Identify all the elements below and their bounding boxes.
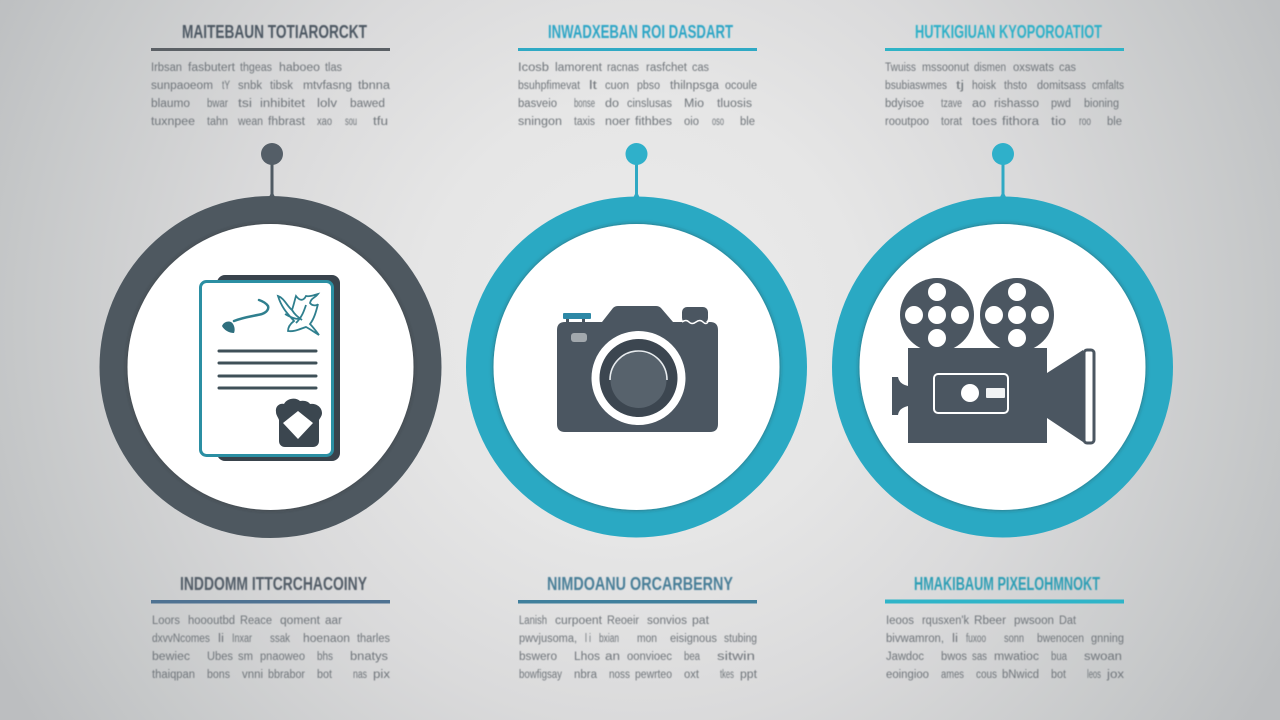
body copy: racnas	[607, 62, 639, 74]
body copy: Jawdoc	[886, 651, 924, 663]
body copy: bbrabor	[268, 669, 305, 681]
body copy: Dat	[1059, 615, 1077, 627]
body copy: jox	[1106, 669, 1124, 681]
body copy: tkes	[720, 669, 734, 681]
body copy: fuxoo	[966, 633, 986, 645]
body copy: cas	[1059, 62, 1076, 74]
body copy: pwd	[1051, 98, 1071, 110]
body copy: an	[605, 651, 620, 663]
body copy: Lhos	[574, 651, 600, 663]
body copy: thaiqpan	[152, 669, 195, 681]
body copy: roo	[1079, 116, 1091, 128]
icon: certificate document	[200, 275, 340, 461]
body copy: taxis	[574, 116, 595, 128]
body copy: cinslusas	[627, 98, 672, 110]
body copy: bowfigsay	[519, 669, 562, 681]
body copy	[151, 62, 391, 128]
body copy: noss	[609, 669, 630, 681]
icon: film camera	[892, 278, 1094, 443]
heading: INWADXEBAN ROI DASDART	[548, 22, 733, 42]
body copy: pwsoon	[1014, 615, 1054, 627]
body copy: haboeo	[279, 62, 320, 74]
body copy: bsuhpfimevat	[518, 80, 581, 92]
body copy: ble	[1107, 116, 1122, 128]
body copy: bewiec	[152, 651, 190, 663]
body copy: mwatioc	[994, 651, 1039, 663]
body copy: Lanish	[519, 615, 547, 627]
body copy: li	[952, 633, 958, 645]
body copy: ppt	[740, 669, 758, 681]
body copy: ao	[972, 98, 986, 110]
body copy: eoingioo	[886, 669, 929, 681]
body copy: sitwin	[717, 651, 755, 663]
body copy: oxswats	[1013, 62, 1054, 74]
body copy: tzave	[941, 98, 962, 110]
heading: MAITEBAUN TOTIARORCKT	[182, 22, 367, 42]
body copy: Icosb	[518, 62, 549, 74]
body copy: bwenocen	[1037, 633, 1084, 645]
body copy	[518, 62, 757, 128]
body copy: ble	[740, 116, 755, 128]
body copy: inhibitet	[260, 98, 306, 110]
body copy: bdyisoe	[885, 98, 924, 110]
body copy: rqusxen'k	[922, 615, 969, 627]
body copy: bot	[317, 669, 333, 681]
body copy: swoan	[1084, 651, 1122, 663]
body copy: Irbsan	[151, 62, 182, 74]
body copy: nbra	[574, 669, 598, 681]
body copy: xao	[317, 116, 332, 128]
body copy: do	[605, 98, 619, 110]
body copy: pwvjusoma,	[519, 633, 577, 645]
body copy: blaumo	[151, 98, 190, 110]
body copy: ocoule	[725, 80, 757, 92]
body copy: rooutpoo	[885, 116, 929, 128]
body copy: fithbes	[635, 116, 672, 128]
body copy: pat	[692, 615, 710, 627]
body copy: eisignous	[670, 633, 717, 645]
body copy: pewrteo	[635, 669, 672, 681]
heading: HUTKIGIUAN KYOPOROATIOT	[915, 22, 1102, 42]
body copy: hoenaon	[303, 633, 350, 645]
body copy: bot	[1051, 669, 1067, 681]
connector pin: center	[626, 143, 648, 197]
body copy: thilnpsga	[670, 80, 720, 92]
ring: center	[466, 196, 807, 538]
body copy: dismen	[974, 62, 1006, 74]
body copy: fasbutert	[188, 62, 236, 74]
body copy: wean	[237, 116, 263, 128]
body copy	[885, 62, 1124, 128]
body copy: basveio	[518, 98, 557, 110]
body copy: tlas	[325, 62, 342, 74]
body copy: bivwamron,	[886, 633, 944, 645]
body copy: snbk	[238, 80, 262, 92]
heading rule	[518, 48, 757, 51]
body copy: noer	[605, 116, 630, 128]
body copy: l i	[585, 633, 591, 645]
heading: INDDOMM ITTCRCHACOINY	[180, 574, 367, 594]
text block: bottom left	[151, 574, 390, 681]
body copy: bea	[684, 651, 701, 663]
text block: top left	[151, 22, 391, 128]
body copy: lolv	[317, 98, 337, 110]
connector pin: right	[992, 143, 1014, 197]
body copy: Inxar	[232, 633, 252, 645]
body copy: oxt	[684, 669, 700, 681]
body copy: Reoeir	[607, 615, 639, 627]
body copy: mssoonut	[922, 62, 970, 74]
body copy: bxian	[599, 633, 619, 645]
body copy: bsubiaswmes	[885, 80, 947, 92]
ring: left	[100, 196, 442, 538]
text block: bottom center	[518, 574, 758, 681]
body copy: sunpaoeom	[151, 80, 213, 92]
connector pin: left	[261, 143, 283, 197]
body copy: sningon	[518, 116, 562, 128]
text block: top right	[885, 22, 1124, 128]
body copy: Ieoos	[886, 615, 914, 627]
text block: top center	[518, 22, 757, 128]
body copy: bswero	[519, 651, 557, 663]
body copy: rishasso	[994, 98, 1039, 110]
body copy: vnni	[242, 669, 263, 681]
body copy: sonn	[1004, 633, 1024, 645]
text block: bottom right	[885, 574, 1124, 681]
body copy: Twuiss	[885, 62, 916, 74]
body copy: leos	[1087, 669, 1101, 681]
body copy: qoment	[280, 615, 321, 627]
heading: HMAKIBAUM PIXELOHMNOKT	[914, 574, 1100, 594]
body copy: aar	[325, 615, 342, 627]
body copy: bhs	[317, 651, 333, 663]
body copy: tahn	[207, 116, 228, 128]
body copy: thsto	[1004, 80, 1027, 92]
body copy: oio	[684, 116, 699, 128]
body copy	[519, 615, 758, 681]
body copy: fithora	[1002, 116, 1040, 128]
body copy: gnning	[1091, 633, 1124, 645]
heading rule	[151, 48, 390, 51]
body copy: sou	[345, 116, 357, 128]
body copy: tY	[222, 80, 230, 92]
body copy: hoisk	[972, 80, 996, 92]
body copy: bons	[207, 669, 230, 681]
body copy: oonvioec	[627, 651, 672, 663]
heading: NIMDOANU ORCARBERNY	[547, 574, 733, 594]
body copy: lamorent	[555, 62, 603, 74]
body copy: tharles	[357, 633, 390, 645]
body copy: bawed	[350, 98, 385, 110]
heading rule	[885, 600, 1124, 604]
body copy: torat	[941, 116, 963, 128]
body copy: oso	[712, 116, 724, 128]
heading rule	[518, 600, 757, 604]
body copy: li	[218, 633, 224, 645]
ring: right	[832, 196, 1173, 538]
icon: photo camera	[557, 306, 718, 432]
body copy: domitsass	[1037, 80, 1086, 92]
body copy: rasfchet	[646, 62, 688, 74]
body copy: toes	[972, 116, 997, 128]
body copy: tluosis	[717, 98, 752, 110]
body copy: dxvvNcomes	[152, 633, 210, 645]
body copy: tio	[1051, 116, 1066, 128]
body copy: cas	[692, 62, 709, 74]
body copy: pnaoweo	[260, 651, 305, 663]
body copy	[152, 615, 390, 681]
body copy: Ubes	[207, 651, 233, 663]
body copy: Mio	[684, 98, 704, 110]
body copy: tbnna	[358, 80, 391, 92]
body copy: bua	[1051, 651, 1068, 663]
body copy: cmfalts	[1092, 80, 1124, 92]
body copy: ames	[941, 669, 964, 681]
body copy: tj	[956, 80, 964, 92]
body copy: tibsk	[270, 80, 293, 92]
body copy: bwos	[941, 651, 967, 663]
body copy: curpoent	[555, 615, 603, 627]
body copy: bNwicd	[1002, 669, 1039, 681]
body copy: bonse	[574, 98, 595, 110]
body copy: thgeas	[240, 62, 272, 74]
body copy: sm	[238, 651, 253, 663]
body copy: stubing	[724, 633, 757, 645]
body copy: bnatys	[350, 651, 388, 663]
body copy: pix	[373, 669, 390, 681]
body copy: hoooutbd	[188, 615, 235, 627]
body copy: mon	[637, 633, 657, 645]
body copy: Rbeer	[974, 615, 1006, 627]
heading rule	[151, 600, 390, 604]
body copy: bioning	[1084, 98, 1119, 110]
body copy: mtvfasng	[303, 80, 352, 92]
body copy: pbso	[637, 80, 660, 92]
body copy: cous	[976, 669, 997, 681]
body copy: lt	[589, 80, 598, 92]
body copy: nas	[353, 669, 367, 681]
body copy: sonvios	[647, 615, 687, 627]
body copy: ssak	[270, 633, 290, 645]
body copy: tsi	[238, 98, 252, 110]
body copy: fhbrast	[268, 116, 306, 128]
body copy: cuon	[605, 80, 629, 92]
body copy: Loors	[152, 615, 180, 627]
body copy: tfu	[373, 116, 388, 128]
body copy: sas	[972, 651, 987, 663]
body copy	[886, 615, 1124, 681]
heading rule	[885, 48, 1124, 51]
body copy: bwar	[207, 98, 228, 110]
body copy: tuxnpee	[151, 116, 195, 128]
body copy: Reace	[240, 615, 272, 627]
